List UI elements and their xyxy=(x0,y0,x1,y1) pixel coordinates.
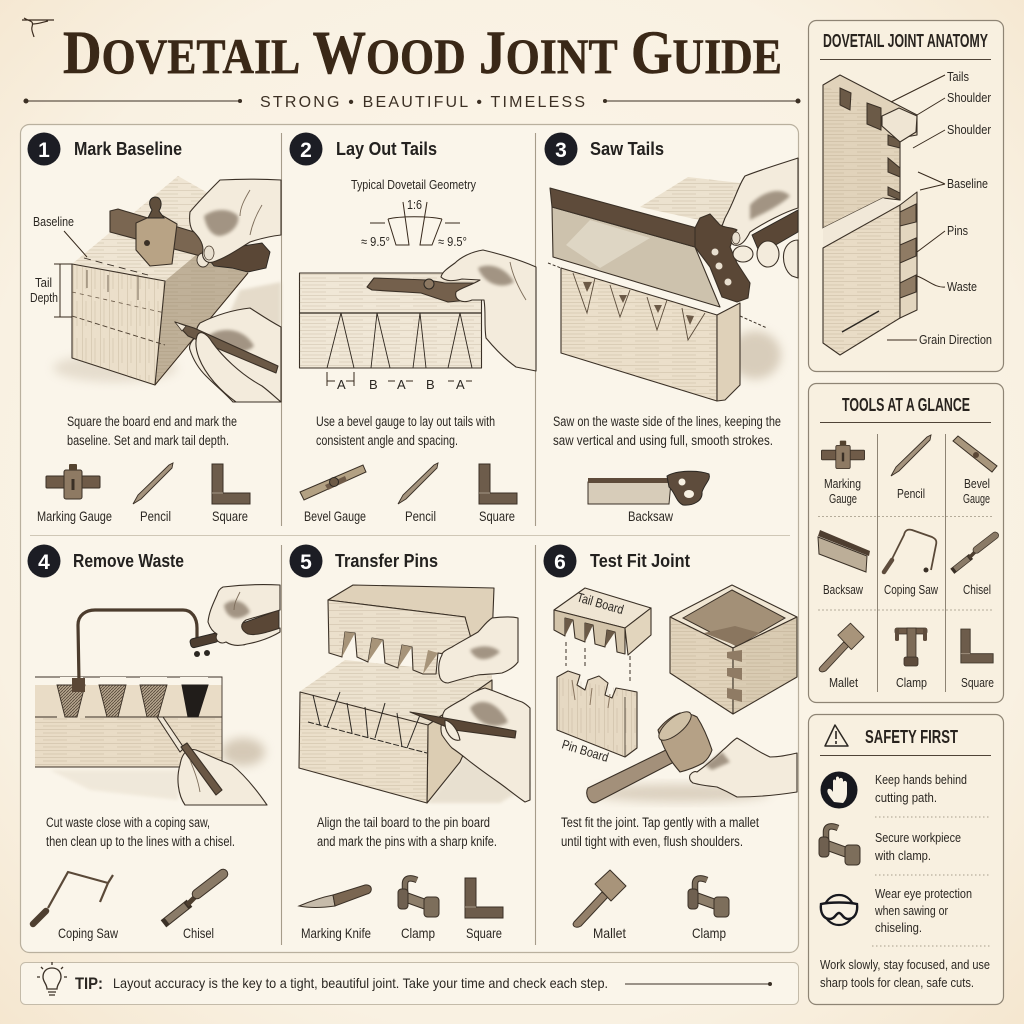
tool: clamp: Clamp xyxy=(692,925,726,941)
spacing labels: B xyxy=(369,377,378,392)
step number 5: 5 xyxy=(300,551,312,574)
tool cell: bevel gauge: Gauge xyxy=(963,491,990,506)
heading: remove waste: Remove Waste xyxy=(73,551,184,571)
tool cell: marking gauge xyxy=(821,441,865,506)
tool: pencil xyxy=(133,463,173,524)
tool cell: chisel: Chisel xyxy=(963,582,991,597)
tool: square: Square xyxy=(212,508,248,524)
tool cell: bevel gauge xyxy=(953,436,997,506)
panel: step 6 test fit joint xyxy=(544,544,797,941)
tool: backsaw: Backsaw xyxy=(628,508,674,524)
callout labels: Waste xyxy=(947,279,977,294)
step number 5 xyxy=(290,544,322,578)
description: Square the board end and mark the xyxy=(67,414,237,429)
heading: saw tails: Saw Tails xyxy=(590,139,664,159)
safety text: clamp xyxy=(874,830,961,863)
tool: square xyxy=(479,464,517,524)
tool: marking knife xyxy=(299,885,371,941)
tool: coping saw: Coping Saw xyxy=(58,925,119,941)
subtitle: STRONG • BEAUTIFUL • TIMELESS xyxy=(260,94,585,111)
illustration: tail board xyxy=(554,588,651,655)
callout labels: Tails xyxy=(947,69,969,84)
tool: backsaw xyxy=(588,471,709,524)
tool: clamp xyxy=(398,878,439,941)
panel: step 1 mark baseline xyxy=(28,132,281,524)
tool: clamp xyxy=(688,878,729,941)
tool: bevel gauge xyxy=(300,465,366,524)
tool cell: marking gauge: Gauge xyxy=(829,491,857,506)
tool: coping saw xyxy=(33,872,119,941)
tool cell: marking gauge: Marking xyxy=(824,476,861,491)
tool cell: chisel xyxy=(955,535,995,597)
description: saw vertical and using full, smooth strokes. xyxy=(553,433,773,448)
tool cell: coping saw: Coping Saw xyxy=(884,582,938,597)
tool: marking knife: Marking Knife xyxy=(301,925,371,941)
step number 1 xyxy=(28,132,60,166)
lower hand and knife xyxy=(410,688,530,802)
upper hand xyxy=(439,617,518,683)
panel: step 3 saw tails xyxy=(544,132,798,524)
description xyxy=(67,414,237,448)
callout labels: Shoulder xyxy=(947,122,992,137)
saw blade xyxy=(550,188,720,307)
callout labels xyxy=(887,69,992,347)
description: Use a bevel gauge to lay out tails with xyxy=(316,414,495,429)
description xyxy=(46,815,235,849)
labels: baseline and tail depth xyxy=(30,214,87,317)
tool: marking gauge xyxy=(37,464,112,524)
icon: clamp xyxy=(819,826,860,865)
tool: mallet xyxy=(573,870,626,941)
tail board xyxy=(328,585,494,674)
step number 4: 4 xyxy=(38,551,50,574)
tip text: Layout accuracy is the key to a tight, beautiful joint. Take your time and check each step. xyxy=(113,975,608,991)
description: baseline. Set and mark tail depth. xyxy=(67,433,229,448)
title: DOVETAIL WOOD JOINT GUIDE xyxy=(63,20,782,87)
step number 4 xyxy=(28,544,60,578)
panel: step 5 transfer pins xyxy=(290,544,530,941)
tool cell: mallet xyxy=(819,623,864,690)
tool cell: square xyxy=(961,629,994,690)
marking gauge xyxy=(110,197,214,266)
hand xyxy=(441,250,536,371)
description: Test fit the joint. Tap gently with a mallet xyxy=(561,815,759,830)
illustration: tail board: Tail Board xyxy=(575,589,625,617)
labels: baseline and tail depth: Baseline xyxy=(33,214,74,229)
step number 3 xyxy=(544,132,578,166)
callout labels: Shoulder xyxy=(947,90,992,105)
coping saw xyxy=(78,610,197,682)
spacing labels: A xyxy=(456,377,465,392)
panel: six-step guide xyxy=(20,124,798,952)
safety text: eye protection xyxy=(874,886,972,935)
tools heading: TOOLS AT A GLANCE xyxy=(842,395,970,415)
spacing labels: A xyxy=(397,377,406,392)
illustration: assembled dovetail box xyxy=(670,585,797,714)
hand xyxy=(722,158,798,278)
panel: tools at a glance xyxy=(808,384,1004,702)
panel: step 2 lay out tails xyxy=(290,132,536,524)
description: Align the tail board to the pin board xyxy=(317,815,490,830)
diagram: typical dovetail geometry: Typical Dovetail Geometry xyxy=(351,177,476,192)
description: then clean up to the lines with a chisel. xyxy=(46,834,235,849)
tool: pencil: Pencil xyxy=(140,508,171,524)
tool cell: clamp: Clamp xyxy=(896,675,927,690)
icon: light bulb xyxy=(37,962,67,995)
saw handle xyxy=(695,214,750,302)
diagram: typical dovetail geometry: 1:6 xyxy=(407,197,422,212)
illustration: pin board: Pin Board xyxy=(560,737,610,765)
tool: square xyxy=(465,878,503,941)
description: Saw on the waste side of the lines, keeping the xyxy=(553,414,781,429)
illustration: tail board over pin board xyxy=(299,585,530,803)
bevel gauge xyxy=(367,278,503,302)
tool cell: backsaw xyxy=(818,530,870,597)
diagram: typical dovetail geometry: ≈ 9.5° xyxy=(438,234,467,249)
diagram: typical dovetail geometry: ≈ 9.5° xyxy=(361,234,390,249)
safety closing text xyxy=(820,957,990,990)
description: and mark the pins with a sharp knife. xyxy=(317,834,497,849)
heading: test fit joint: Test Fit Joint xyxy=(590,551,690,571)
description xyxy=(561,815,759,849)
tool: square xyxy=(212,464,250,524)
tool cell: coping saw xyxy=(884,530,938,597)
illustration: coping saw and chisel on board xyxy=(35,585,280,805)
diagram: typical dovetail geometry xyxy=(351,177,476,249)
spacing labels xyxy=(327,372,472,392)
tool: mallet: Mallet xyxy=(593,925,626,941)
chisel and hand xyxy=(157,717,267,805)
safety closing text: sharp tools for clean, safe cuts. xyxy=(820,975,974,990)
safety text: clamp: Secure workpiece xyxy=(875,830,961,845)
step number 3: 3 xyxy=(555,139,567,162)
tool cell: square: Square xyxy=(961,675,994,690)
tool: chisel xyxy=(167,874,223,941)
tool: clamp: Clamp xyxy=(401,925,435,941)
panel: dovetail joint anatomy xyxy=(808,20,1004,372)
tip bar xyxy=(20,962,798,1004)
safety text: hands: Keep hands behind xyxy=(875,772,967,787)
description xyxy=(553,414,781,448)
panel: safety first xyxy=(808,714,1004,1004)
illustration: sawing tails with backsaw xyxy=(548,158,798,401)
description xyxy=(317,815,497,849)
safety text: eye protection: when sawing or xyxy=(874,903,949,918)
illustration: mallet and hand xyxy=(587,707,797,803)
spacing labels: A xyxy=(337,377,346,392)
safety text: hands xyxy=(875,772,967,805)
description xyxy=(316,414,495,448)
illustration: board with layout lines xyxy=(300,250,536,392)
icon: safety goggles xyxy=(821,895,857,925)
description: Cut waste close with a coping saw, xyxy=(46,815,210,830)
panel: step 4 remove waste xyxy=(28,544,280,941)
callout labels: Baseline xyxy=(947,176,988,191)
hand with saw handle xyxy=(189,585,280,657)
tool: square: Square xyxy=(479,508,515,524)
description: consistent angle and spacing. xyxy=(316,433,458,448)
illustration: pin board xyxy=(557,671,637,765)
tool cell: mallet: Mallet xyxy=(829,675,858,690)
step number 1: 1 xyxy=(38,139,50,162)
safety closing text: Work slowly, stay focused, and use xyxy=(820,957,990,972)
tool: pencil xyxy=(398,463,438,524)
callout labels: Pins xyxy=(947,223,968,238)
upper hand xyxy=(190,179,281,272)
lower hand and pencil xyxy=(175,308,281,402)
tip label: TIP: xyxy=(75,974,103,993)
callout labels: Grain Direction xyxy=(919,332,992,347)
tool: marking gauge: Marking Gauge xyxy=(37,508,112,524)
icon: warning triangle xyxy=(825,725,848,746)
step number 6 xyxy=(544,544,576,578)
tool cell: bevel gauge: Bevel xyxy=(964,476,990,491)
step number 6: 6 xyxy=(554,551,566,574)
tool: chisel: Chisel xyxy=(183,925,214,941)
safety text: eye protection: Wear eye protection xyxy=(875,886,972,901)
step number 2 xyxy=(290,132,322,166)
safety text: eye protection: chiseling. xyxy=(875,920,922,935)
labels: baseline and tail depth: Tail xyxy=(35,275,52,290)
tool cell: pencil: Pencil xyxy=(897,486,925,501)
tool cell: pencil xyxy=(891,435,931,501)
heading: mark baseline: Mark Baseline xyxy=(74,139,182,159)
spacing labels: B xyxy=(426,377,435,392)
labels: baseline and tail depth: Depth xyxy=(30,290,58,305)
heading: lay out tails: Lay Out Tails xyxy=(336,139,437,159)
heading: transfer pins: Transfer Pins xyxy=(335,551,438,571)
tool: pencil: Pencil xyxy=(405,508,436,524)
illustration: squared board with marking gauge and hands xyxy=(30,176,281,402)
description: until tight with even, flush shoulders. xyxy=(561,834,743,849)
tool cell: clamp xyxy=(895,628,927,690)
icon: stop hand xyxy=(820,772,858,808)
step number 2: 2 xyxy=(300,139,312,162)
icon: small dovetail logo mark xyxy=(22,18,54,37)
safety text: hands: cutting path. xyxy=(875,790,937,805)
joint diagram xyxy=(823,75,917,355)
tool cell: backsaw: Backsaw xyxy=(823,582,863,597)
tool: square: Square xyxy=(466,925,502,941)
safety text: clamp: with clamp. xyxy=(874,848,931,863)
tool: bevel gauge: Bevel Gauge xyxy=(304,508,366,524)
alignment arrows xyxy=(566,642,630,684)
safety heading: SAFETY FIRST xyxy=(865,727,958,747)
